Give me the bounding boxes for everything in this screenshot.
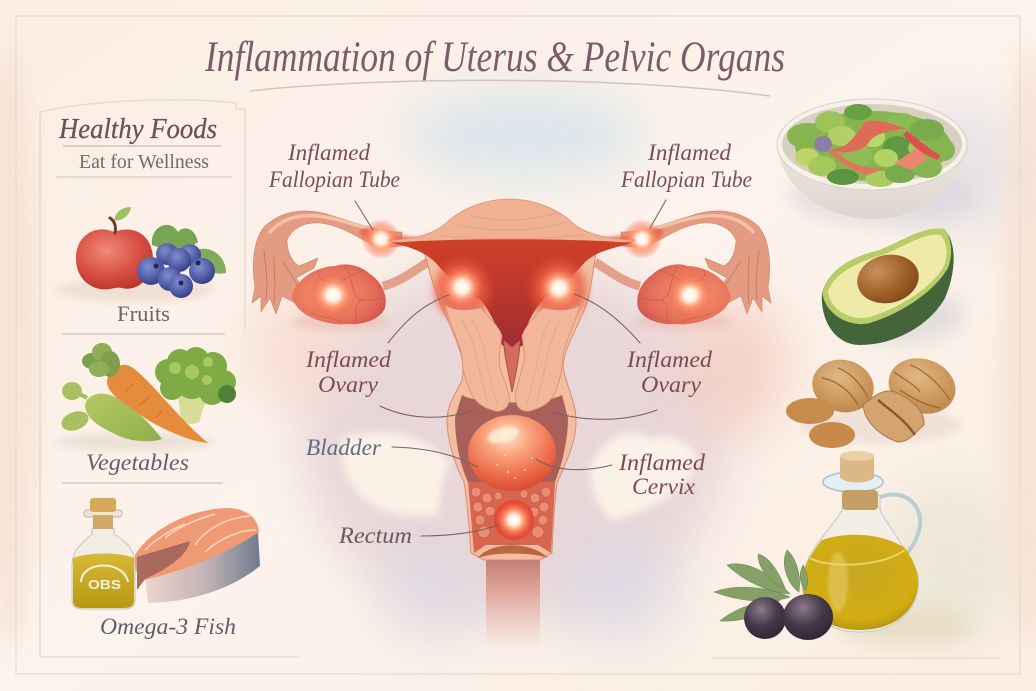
salad olive piece — [814, 136, 832, 152]
panel frame — [40, 100, 300, 657]
icon: nuts — [786, 350, 963, 448]
tube inflammation redness — [365, 232, 425, 243]
ovary — [292, 264, 386, 324]
label: inflamed fallopian tube left — [268, 140, 400, 192]
label: inflamed fallopian tube left: Inflamed — [287, 140, 370, 165]
icon: vegetables — [55, 343, 236, 451]
inflamed ball: bladder and cervix — [468, 415, 556, 491]
lower canal — [486, 547, 540, 649]
label: vegetables: Vegetables — [86, 450, 189, 475]
label: bladder: Bladder — [306, 435, 382, 460]
panel: healthy foods — [40, 100, 300, 657]
right flap — [515, 305, 580, 411]
salad pink strips — [830, 121, 907, 152]
dome muscle striations — [440, 213, 582, 239]
panel subheading: Eat for Wellness — [79, 151, 209, 173]
salmon top face — [135, 508, 259, 580]
icon: olive oil jug with olives — [714, 451, 975, 645]
label: inflamed ovary right: Inflamed — [626, 347, 713, 372]
ovary lobes — [310, 266, 385, 324]
pelvic bone shapes — [340, 432, 697, 520]
label: inflamed ovary left: Ovary — [318, 372, 379, 397]
right tube and ovary — [595, 211, 771, 331]
label: inflamed ovary right: Ovary — [641, 372, 702, 397]
label: rectum: Rectum — [338, 523, 412, 548]
salmon notch — [137, 541, 190, 590]
bottle — [72, 528, 135, 609]
salmon skin side — [145, 532, 260, 603]
panel heading: Healthy Foods — [58, 113, 217, 145]
title: Inflammation of Uterus & Pelvic Organs — [204, 34, 785, 81]
fundus dome — [388, 199, 636, 245]
olives — [744, 597, 786, 639]
pepper — [85, 394, 162, 441]
title underline — [250, 80, 770, 96]
bottle arc — [81, 566, 128, 582]
left tube and ovary — [252, 211, 428, 331]
ligament — [383, 262, 428, 286]
diagram: uterus and pelvic organs — [252, 199, 771, 649]
salad leaves — [787, 104, 955, 187]
flap striations — [462, 320, 560, 405]
rectal chamber — [468, 482, 555, 553]
inner folds — [504, 340, 520, 392]
label: inflamed cervix: Inflamed — [618, 450, 706, 475]
carrot — [107, 365, 208, 443]
carrot greens — [82, 343, 120, 377]
oil — [802, 535, 918, 630]
jug body — [802, 495, 918, 632]
olive leaves — [714, 550, 808, 621]
jug neck and lip — [823, 472, 883, 492]
bottle label text: OBS — [88, 578, 121, 592]
tube inflammation — [361, 219, 401, 259]
label: inflamed cervix: Cervix — [632, 474, 696, 499]
icon: salad bowl — [777, 99, 980, 225]
uterus outer wall — [423, 245, 597, 560]
wall redness around inflammation — [434, 260, 587, 320]
broccoli — [178, 395, 208, 424]
label: omega-3 fish: Omega-3 Fish — [100, 614, 236, 639]
left flap — [445, 305, 509, 411]
fallopian tube and fimbriae — [252, 211, 402, 314]
label: inflamed cervix — [618, 450, 706, 499]
inflamed ball: rectum — [494, 500, 534, 540]
uterine cavity — [392, 239, 632, 352]
jug handle — [880, 495, 920, 556]
leader lines — [355, 200, 666, 536]
label: inflamed ovary right — [626, 347, 713, 397]
label: inflamed fallopian tube right: Inflamed — [647, 140, 731, 165]
label: fruits: Fruits — [117, 301, 170, 326]
lower body cavity — [455, 395, 568, 482]
cork — [840, 453, 874, 482]
label: inflamed fallopian tube right: Fallopian Tube — [620, 167, 752, 192]
label: inflamed ovary left: Inflamed — [305, 347, 392, 372]
label: inflamed fallopian tube right — [620, 140, 752, 192]
icon: apple and blueberries — [55, 207, 226, 302]
icon: avocado — [822, 228, 965, 345]
icon: omega-3 oil bottle and salmon — [72, 498, 260, 609]
label: inflamed fallopian tube left: Fallopian Tube — [268, 167, 400, 192]
label: inflamed ovary left — [305, 347, 392, 397]
inflammation spots on uterus — [438, 263, 583, 312]
